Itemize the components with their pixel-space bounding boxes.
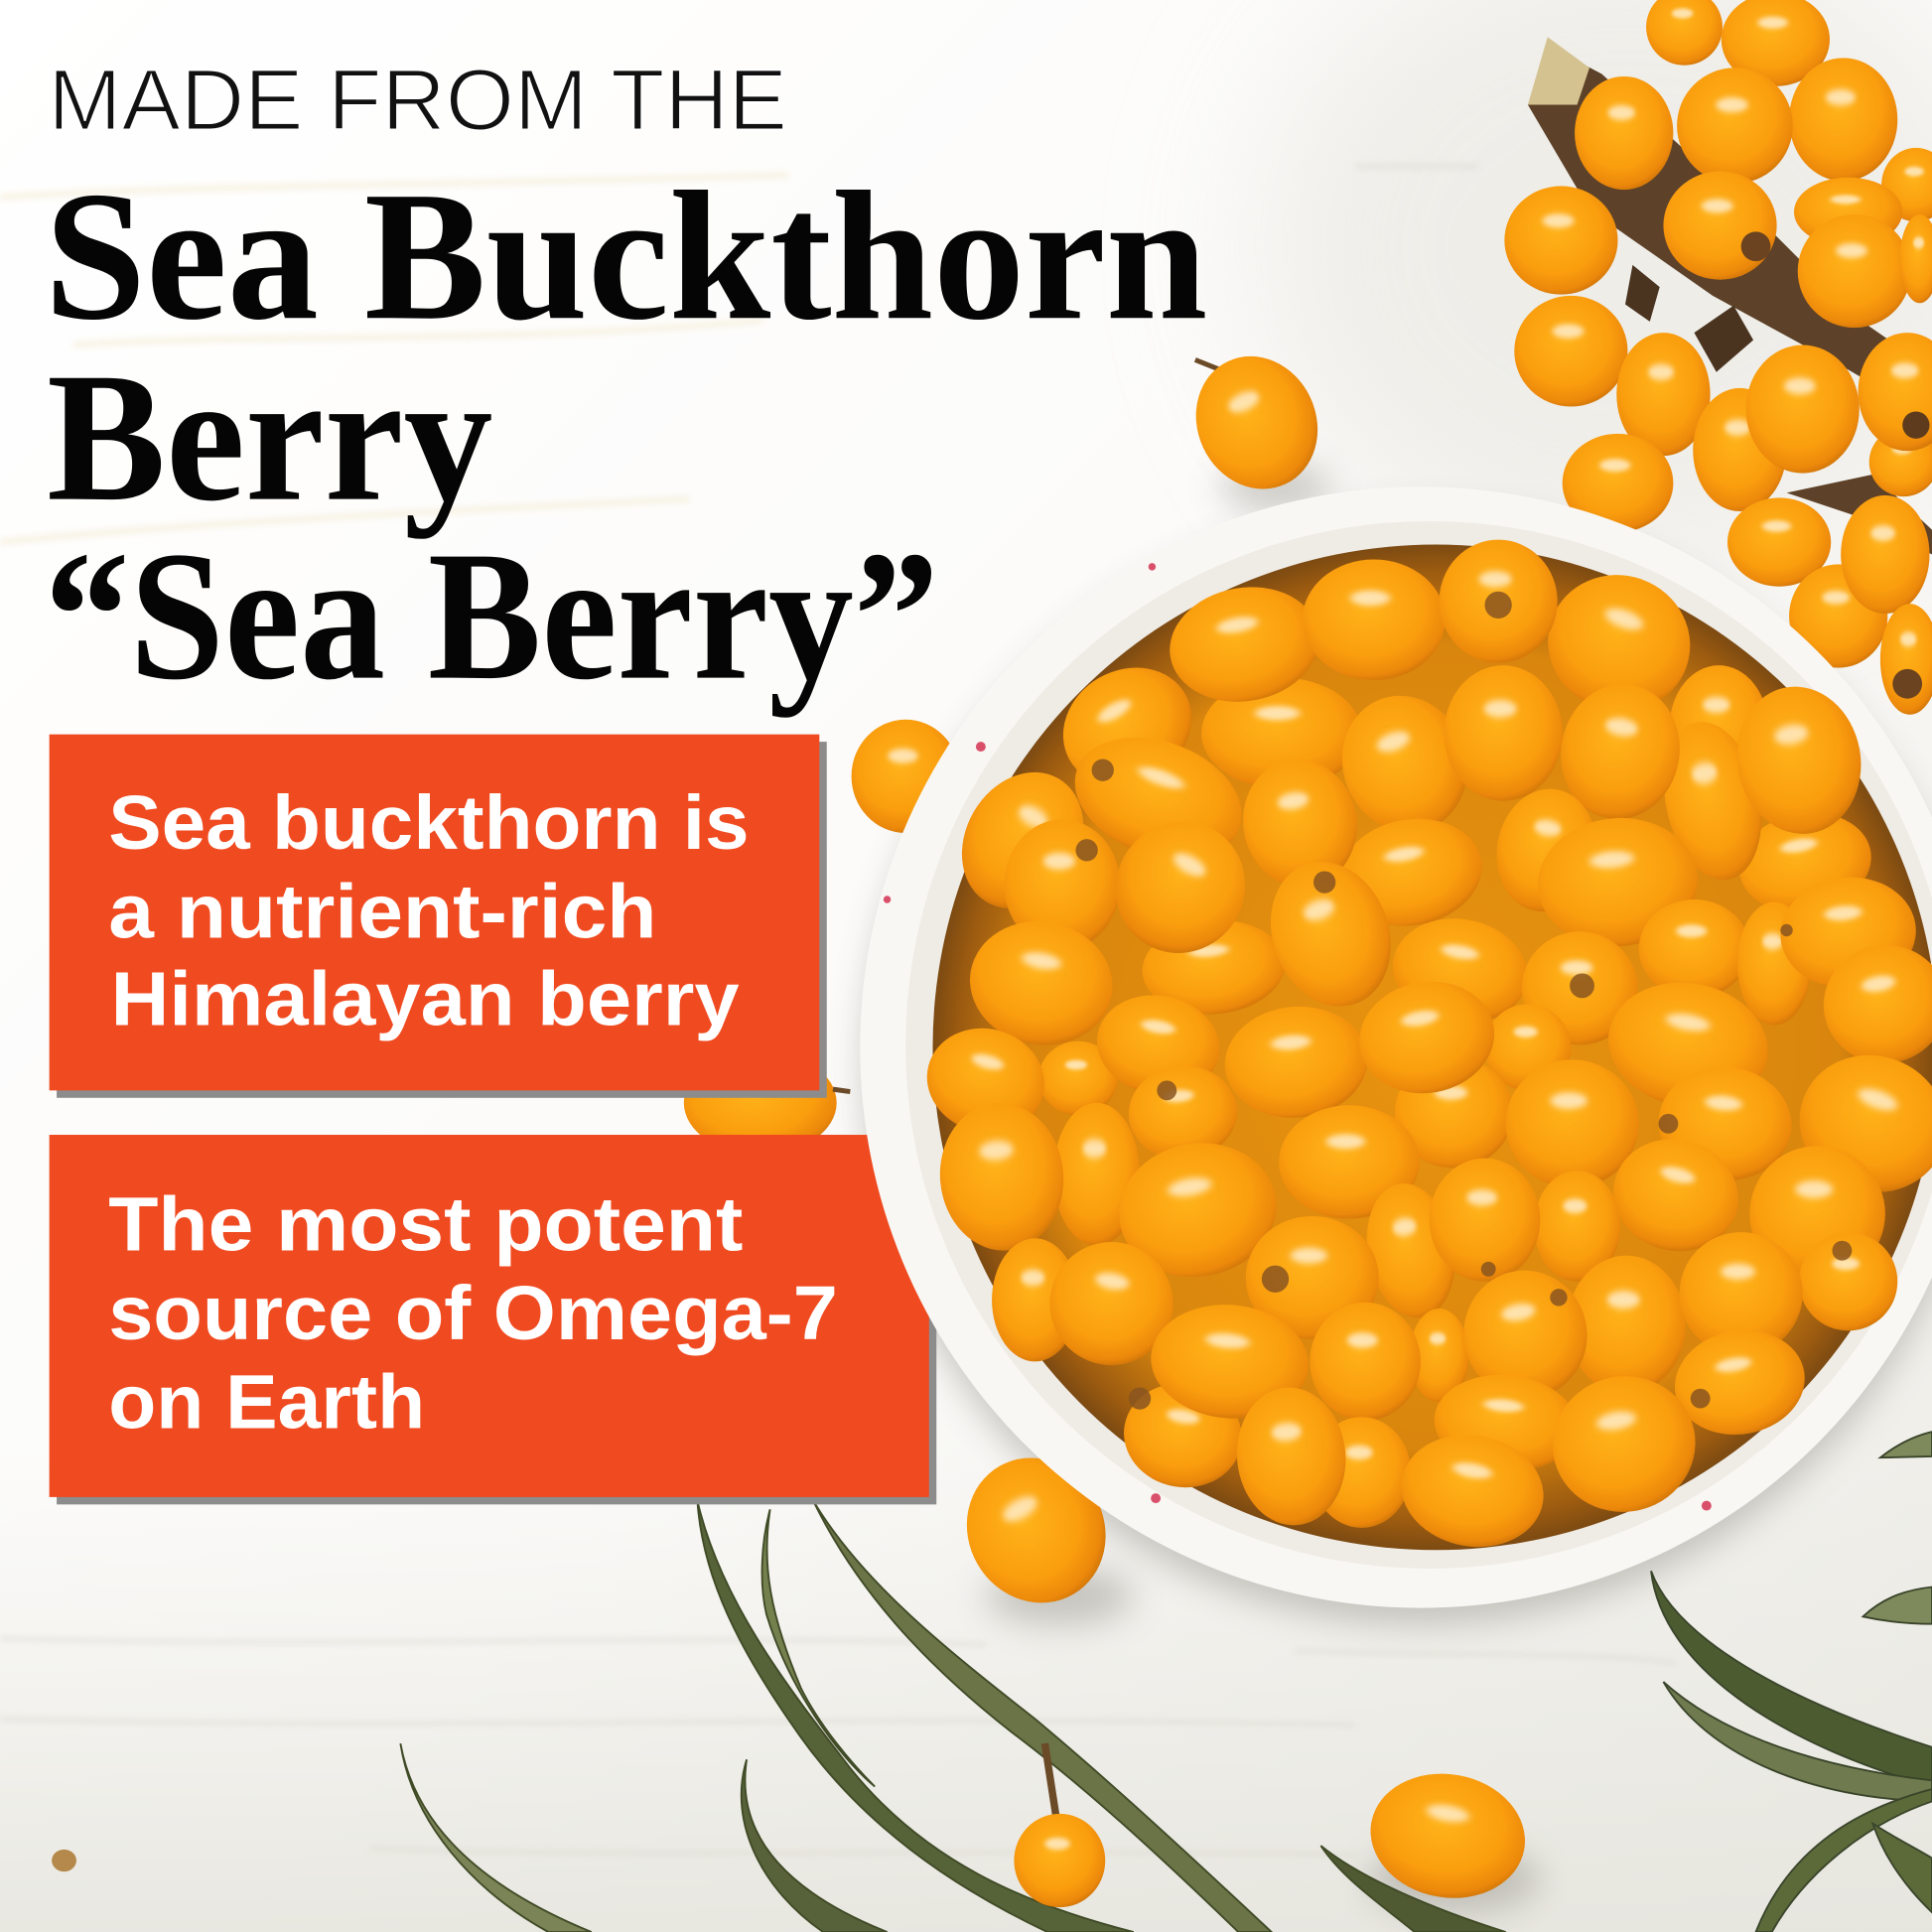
loose berry shadows — [986, 465, 1540, 1913]
loose berries — [684, 337, 1535, 1910]
branch — [1528, 50, 1932, 419]
text: fact two — [108, 1182, 838, 1445]
text: fact one: a nutrient-rich — [108, 869, 656, 954]
text: fact two: on Earth — [108, 1359, 425, 1445]
bowl — [860, 486, 1932, 1608]
panel: omega-7 fact — [50, 1135, 929, 1497]
text: fact one — [108, 780, 750, 1042]
heading: sea buckthorn berry — [45, 154, 1207, 719]
text: fact one: Sea buckthorn is — [108, 780, 750, 866]
text: fact two: The most potent — [108, 1182, 743, 1268]
leaves: lower left sprigs — [400, 1501, 1506, 1932]
bowl shadow — [864, 510, 1932, 1624]
berries in bowl — [915, 540, 1932, 1558]
text: fact two: source of Omega-7 — [108, 1271, 838, 1356]
berries on branch — [1504, 0, 1932, 715]
heading: sea buckthorn berry: Sea Buckthorn — [45, 154, 1207, 358]
heading: made from the: MADE FROM THE — [48, 52, 787, 148]
branch with berries, top right — [1504, 0, 1932, 715]
heading: sea buckthorn berry: “Sea Berry” — [45, 514, 939, 719]
leaves: lower right sprigs — [1651, 1432, 1932, 1932]
heading: sea buckthorn berry: Berry — [47, 336, 492, 540]
panel: sea buckthorn fact — [50, 735, 819, 1090]
text: fact one: Himalayan berry — [111, 957, 740, 1042]
box shadows — [57, 742, 936, 1504]
